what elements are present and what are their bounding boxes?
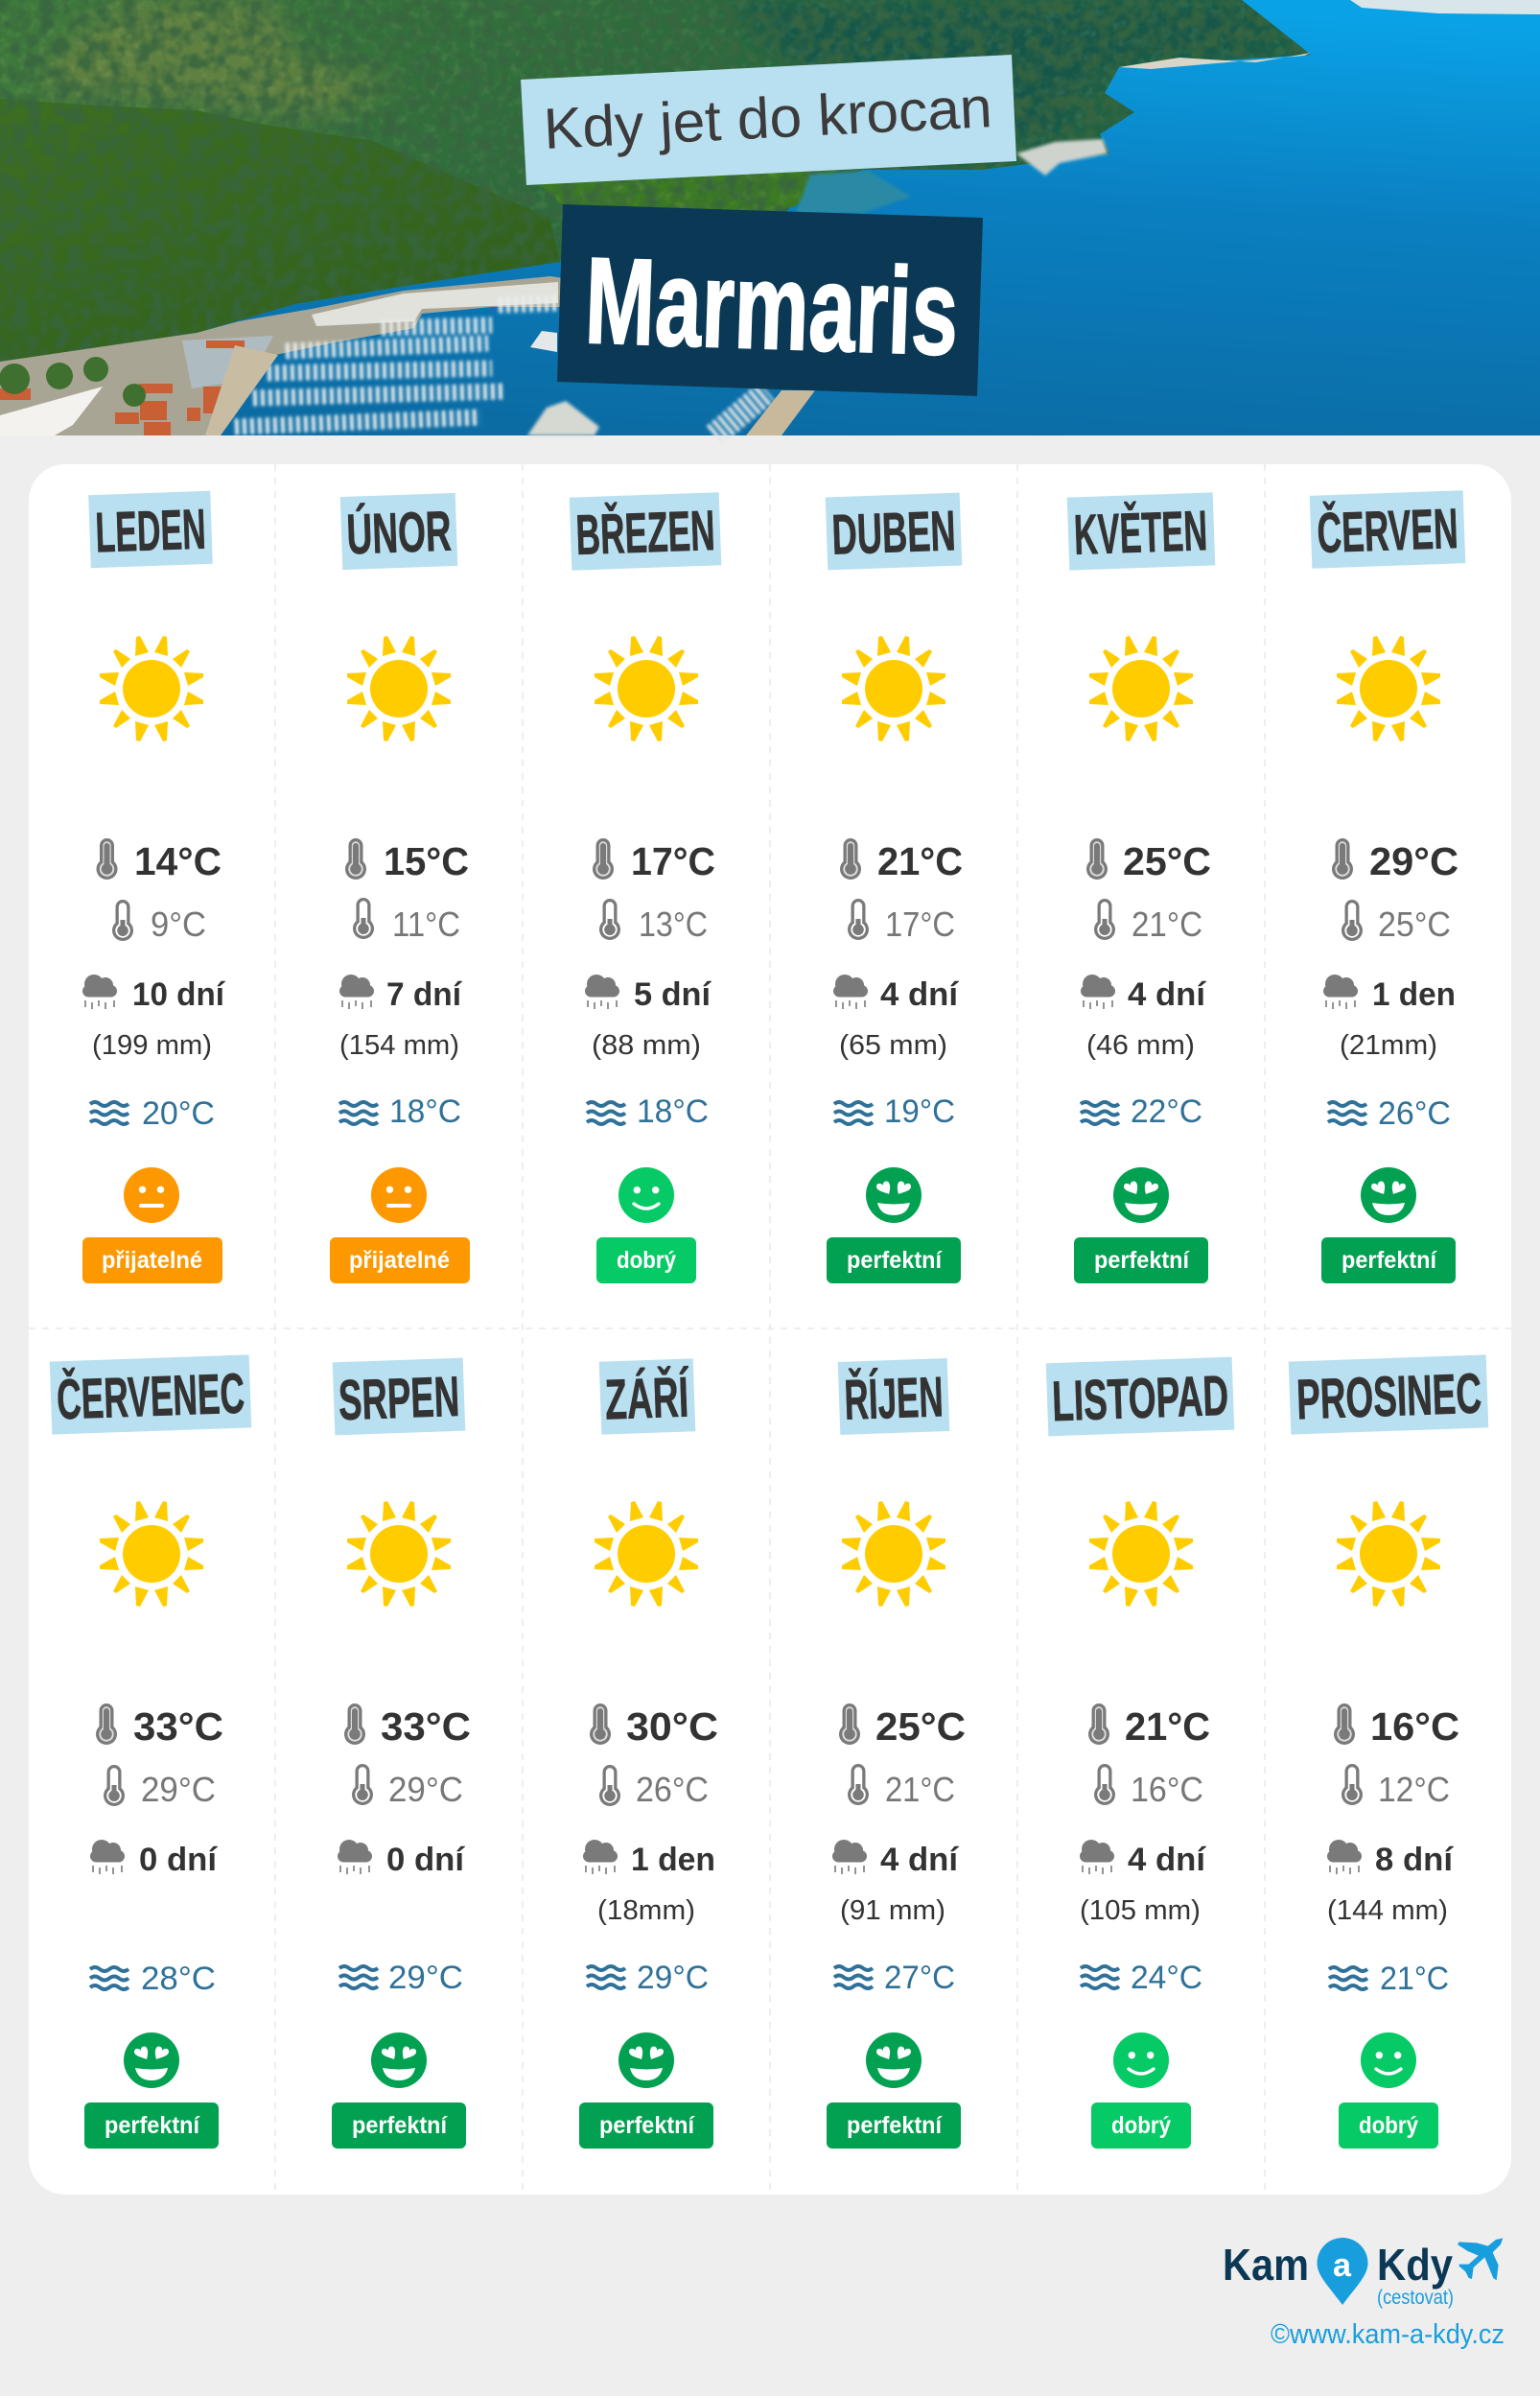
max temperature: 30°C (626, 1704, 718, 1749)
icon: thermometer high (96, 1703, 117, 1745)
icon: rain (1323, 975, 1358, 1009)
max temperature: 25°C (875, 1704, 966, 1749)
month heading (1067, 492, 1215, 571)
min temperature: 21°C (885, 1770, 955, 1809)
column: leden (82, 491, 226, 1283)
rainfall: (88 mm) (592, 1030, 701, 1061)
icon: thermometer low (1094, 899, 1115, 940)
icon: rain (585, 975, 619, 1009)
title label: Marmaris (583, 232, 961, 382)
icon: thermometer high (345, 838, 366, 880)
sea temperature: 22°C (1131, 1093, 1202, 1130)
max temperature: 33°C (133, 1704, 223, 1749)
rating badge (330, 1237, 470, 1283)
icon: waves (339, 1966, 378, 1988)
rating badge (1074, 1237, 1208, 1283)
month heading (1046, 1357, 1234, 1436)
icon: waves (1329, 1967, 1367, 1989)
rating badge (84, 2102, 219, 2149)
column: rijen (827, 1358, 966, 2149)
icon: thermometer low (112, 900, 133, 941)
column: brezen (570, 492, 721, 1283)
column: duben (826, 493, 963, 1283)
icon: thermometer low (352, 1764, 373, 1805)
max temperature: 15°C (384, 839, 469, 883)
max temperature: 25°C (1123, 839, 1211, 883)
rainfall: (105 mm) (1080, 1895, 1201, 1926)
logo word Kam: Kam (1223, 2240, 1309, 2290)
rainy days: 1 den (631, 1842, 715, 1878)
icon: thermometer high (839, 1703, 860, 1745)
rainy days: 4 dní (880, 976, 960, 1013)
rating badge: dobrý (1359, 2112, 1418, 2139)
month heading: ZÁŘÍ (604, 1364, 690, 1432)
icon: thermometer low (848, 1764, 869, 1805)
rainy days: 0 dní (139, 1842, 219, 1878)
min temperature: 21°C (1132, 904, 1202, 944)
icon: love face (1113, 1167, 1169, 1223)
max temperature: 33°C (381, 1704, 471, 1749)
rating badge (1091, 2102, 1191, 2149)
month heading (838, 1358, 949, 1435)
rainy days: 0 dní (386, 1842, 466, 1878)
sea temperature: 19°C (884, 1093, 955, 1130)
subtitle label: Kdy jet do krocan (542, 75, 993, 161)
icon: thermometer low (848, 899, 869, 940)
icon: rain (82, 975, 117, 1009)
month heading: BŘEZEN (574, 498, 716, 567)
month heading: LISTOPAD (1051, 1364, 1229, 1433)
icon: sun (1089, 636, 1193, 741)
icon: sun (1337, 636, 1440, 741)
month heading (826, 493, 962, 570)
icon: good face (1361, 2032, 1416, 2088)
icon: waves (90, 1967, 128, 1989)
rating badge: dobrý (1111, 2112, 1171, 2139)
logo tagline: (cestovat) (1377, 2287, 1454, 2309)
min temperature: 16°C (1131, 1770, 1203, 1809)
icon: sun (842, 1501, 945, 1607)
month heading (599, 1358, 695, 1435)
month heading: KVĚTEN (1073, 498, 1208, 567)
icon: sun (595, 636, 698, 741)
icon: love face (1361, 1167, 1416, 1223)
logo word Kdy: Kdy (1377, 2240, 1453, 2290)
month heading: LEDEN (94, 498, 207, 564)
icon: sun (100, 1501, 203, 1607)
rainfall: (199 mm) (92, 1030, 212, 1061)
rainy days: 5 dní (634, 976, 712, 1013)
rainfall: (154 mm) (339, 1030, 459, 1061)
icon: neutral face (124, 1167, 179, 1223)
rating badge: perfektní (352, 2112, 448, 2139)
icon: thermometer high (1332, 838, 1353, 880)
sea temperature: 29°C (388, 1960, 463, 1996)
rainy days: 4 dní (1128, 1842, 1207, 1878)
icon: waves (834, 1966, 873, 1988)
logo: Kam a Kdy (1223, 2238, 1503, 2309)
rating badge: perfektní (105, 2112, 200, 2139)
rainfall: (18mm) (597, 1895, 695, 1926)
month heading: DUBEN (830, 499, 957, 567)
icon: thermometer high (1088, 1703, 1109, 1745)
min temperature: 9°C (151, 904, 206, 944)
icon: sun (1337, 1501, 1440, 1607)
sea temperature: 18°C (389, 1093, 461, 1130)
icon: good face (1113, 2032, 1169, 2088)
icon: sun (1089, 1501, 1193, 1607)
icon: thermometer low (599, 1765, 620, 1806)
icon: thermometer low (1094, 1764, 1115, 1805)
icon: thermometer high (344, 1703, 365, 1745)
min temperature: 12°C (1378, 1770, 1450, 1809)
column: zari (579, 1358, 718, 2149)
rating badge: perfektní (1342, 1247, 1437, 1274)
sea temperature: 18°C (637, 1093, 709, 1130)
month heading (333, 1358, 465, 1435)
title label (557, 204, 983, 396)
rating badge: perfektní (599, 2112, 695, 2139)
max temperature: 17°C (631, 839, 715, 883)
rainfall: (46 mm) (1086, 1030, 1195, 1061)
rating badge (827, 1237, 961, 1283)
icon: thermometer high (1086, 838, 1108, 880)
icon: rain (832, 1840, 867, 1874)
max temperature: 14°C (134, 839, 222, 883)
rainy days: 8 dní (1375, 1842, 1455, 1878)
month heading: ŘÍJEN (843, 1364, 945, 1432)
column: prosinec (1289, 1354, 1488, 2149)
icon: love face (618, 2032, 674, 2088)
month heading (340, 493, 457, 570)
rating badge: perfektní (1094, 1247, 1190, 1274)
icon: map pin (1318, 2238, 1367, 2305)
icon: thermometer high (96, 838, 117, 880)
rating badge: dobrý (617, 1247, 676, 1274)
icon: waves (90, 1102, 128, 1124)
max temperature: 29°C (1369, 839, 1458, 883)
column: unor (330, 493, 470, 1283)
max temperature: 21°C (877, 839, 963, 883)
website credit: ©www.kam-a-kdy.cz (1271, 2319, 1505, 2350)
column: srpen (332, 1358, 471, 2149)
icon: good face (618, 1167, 674, 1223)
rainy days: 4 dní (880, 1842, 960, 1878)
panel: monthly weather card (29, 464, 1511, 2195)
icon: waves (1328, 1102, 1366, 1124)
icon: love face (866, 2032, 922, 2088)
min temperature: 13°C (639, 904, 708, 944)
icon: love face (866, 1167, 922, 1223)
min temperature: 17°C (885, 904, 955, 944)
sea temperature: 29°C (637, 1960, 709, 1996)
rating badge (82, 1237, 222, 1283)
rating badge (1339, 2102, 1438, 2149)
icon: sun (347, 636, 451, 741)
rainfall: (144 mm) (1327, 1895, 1448, 1926)
icon: rain (833, 975, 868, 1009)
icon: thermometer low (104, 1765, 125, 1806)
icon: waves (339, 1102, 378, 1124)
icon: sun (842, 636, 945, 741)
month heading (88, 491, 213, 568)
max temperature: 16°C (1370, 1704, 1459, 1749)
month heading (1310, 490, 1465, 569)
month heading: ÚNOR (345, 500, 453, 566)
sea temperature: 20°C (142, 1095, 215, 1132)
min temperature: 26°C (636, 1770, 709, 1809)
icon: rain (1081, 975, 1115, 1009)
icon: waves (834, 1102, 873, 1124)
min temperature: 25°C (1378, 904, 1451, 944)
icon: rain (1327, 1840, 1362, 1874)
icon: sun (595, 1501, 698, 1607)
min temperature: 29°C (141, 1770, 216, 1809)
min temperature: 11°C (392, 904, 460, 944)
rainfall: (65 mm) (839, 1030, 947, 1061)
icon: rain (338, 1840, 372, 1874)
icon: rain (339, 975, 374, 1009)
sea temperature: 27°C (884, 1960, 955, 1996)
sea temperature: 28°C (141, 1961, 216, 1997)
rainfall: (21mm) (1340, 1030, 1437, 1061)
icon: thermometer high (590, 1703, 611, 1745)
icon: love face (124, 2032, 179, 2088)
month heading: SRPEN (338, 1365, 460, 1432)
sea temperature: 24°C (1131, 1960, 1202, 1996)
icon: waves (587, 1102, 625, 1124)
rating badge (1321, 1237, 1456, 1283)
rating badge: přijatelné (102, 1247, 202, 1274)
rating badge: perfektní (847, 1247, 943, 1274)
hero photo: Marmaris bay (0, 0, 1540, 435)
icon: airplane (1458, 2238, 1503, 2280)
column: kveten (1067, 492, 1215, 1283)
sea temperature: 26°C (1378, 1095, 1451, 1132)
icon: waves (1081, 1966, 1119, 1988)
rainy days: 4 dní (1128, 976, 1207, 1013)
month heading: ČERVENEC (56, 1361, 245, 1431)
icon: thermometer low (599, 899, 620, 940)
rating badge (579, 2102, 713, 2149)
rainy days: 7 dní (386, 976, 463, 1013)
icon: love face (371, 2032, 427, 2088)
icon: rain (90, 1840, 125, 1874)
icon: thermometer low (1342, 900, 1363, 941)
icon: thermometer high (1334, 1703, 1355, 1745)
icon: thermometer high (593, 838, 614, 880)
icon: waves (587, 1966, 625, 1988)
icon: sun (347, 1501, 451, 1607)
icon: map pin: a (1333, 2247, 1352, 2284)
rating badge (827, 2102, 961, 2149)
icon: neutral face (371, 1167, 427, 1223)
month heading (50, 1354, 251, 1435)
month heading (570, 492, 721, 571)
icon: thermometer low (1342, 1764, 1363, 1805)
icon: rain (583, 1840, 618, 1874)
icon: sun (100, 636, 203, 741)
subtitle label (521, 55, 1016, 185)
icon: waves (1081, 1102, 1119, 1124)
max temperature: 21°C (1125, 1704, 1210, 1749)
icon: thermometer high (840, 838, 861, 880)
rating badge (596, 1237, 696, 1283)
column: listopad (1046, 1357, 1234, 2149)
icon: thermometer low (353, 898, 374, 939)
icon: rain (1080, 1840, 1114, 1874)
rainy days: 1 den (1372, 976, 1456, 1013)
min temperature: 29°C (388, 1770, 463, 1809)
rating badge: perfektní (847, 2112, 943, 2139)
rainfall: (91 mm) (840, 1895, 945, 1926)
column: cervenec (50, 1354, 251, 2149)
sea temperature: 21°C (1380, 1961, 1449, 1997)
rating badge: přijatelné (349, 1247, 450, 1274)
column: cerven (1310, 490, 1465, 1283)
rating badge (332, 2102, 466, 2149)
rainy days: 10 dní (132, 976, 226, 1013)
